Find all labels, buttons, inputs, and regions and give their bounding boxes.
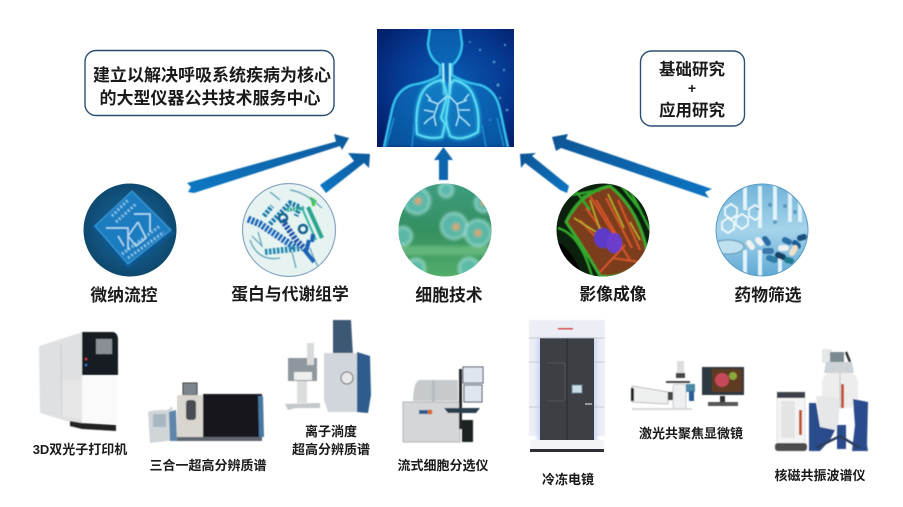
icon: cells bbox=[394, 183, 493, 278]
instrument: NMR spectrometer bbox=[775, 349, 868, 451]
label: proteomics and metabolomics: 蛋白与代谢组学 bbox=[231, 284, 349, 304]
label: cryo-EM: 冷冻电镜 bbox=[542, 472, 594, 487]
instrument: triple quadrupole mass spectrometer bbox=[148, 383, 264, 443]
callout: centre mission bbox=[85, 50, 334, 116]
callout: research types: 应用研究 bbox=[659, 100, 726, 120]
icon: protein structure bbox=[242, 184, 336, 276]
icon: microfluidic chip bbox=[83, 183, 177, 277]
label: ion mobility high-resolution MS bbox=[292, 424, 370, 457]
callout: research types bbox=[640, 51, 744, 126]
arrow: drug screening to centre bbox=[552, 134, 712, 198]
label: cell technology: 细胞技术 bbox=[415, 286, 483, 305]
instrument: flow cytometer sorter bbox=[403, 367, 483, 442]
arrow: cell technology to centre bbox=[434, 147, 453, 180]
label: 3D two-photon printer: 3D双光子打印机 bbox=[33, 442, 127, 457]
callout: centre mission: 的大型仪器公共技术服务中心 bbox=[100, 89, 320, 108]
arrow: microfluidics to centre bbox=[187, 134, 349, 193]
central image: human lungs bbox=[377, 29, 514, 147]
label: ion mobility high-resolution MS: 离子淌度 bbox=[305, 424, 357, 439]
icon: fluorescence cell image bbox=[556, 183, 652, 280]
arrow: proteomics to centre bbox=[320, 153, 370, 193]
label: drug screening: 药物筛选 bbox=[734, 285, 802, 305]
instrument: confocal microscope bbox=[631, 361, 744, 409]
callout: research types: + bbox=[688, 80, 696, 96]
instrument: cryo electron microscope bbox=[529, 320, 605, 452]
instrument: two-photon 3D printer bbox=[39, 332, 118, 431]
icon: drug screening bbox=[712, 183, 809, 278]
instrument: ion mobility mass spectrometer bbox=[285, 320, 371, 413]
label: microfluidics: 微纳流控 bbox=[90, 286, 158, 305]
label: imaging: 影像成像 bbox=[579, 284, 647, 304]
callout: research types: 基础研究 bbox=[659, 59, 726, 79]
label: triple high-resolution MS: 三合一超高分辨质谱 bbox=[149, 458, 267, 473]
arrow: imaging to centre bbox=[520, 153, 569, 193]
label: flow cytometry sorter: 流式细胞分选仪 bbox=[397, 458, 489, 473]
label: NMR spectrometer: 核磁共振波谱仪 bbox=[774, 468, 866, 483]
label: ion mobility high-resolution MS: 超高分辨质谱 bbox=[292, 442, 370, 457]
label: confocal microscope: 激光共聚焦显微镜 bbox=[639, 426, 743, 441]
callout: centre mission: 建立以解决呼吸系统疾病为核心 bbox=[93, 65, 331, 85]
